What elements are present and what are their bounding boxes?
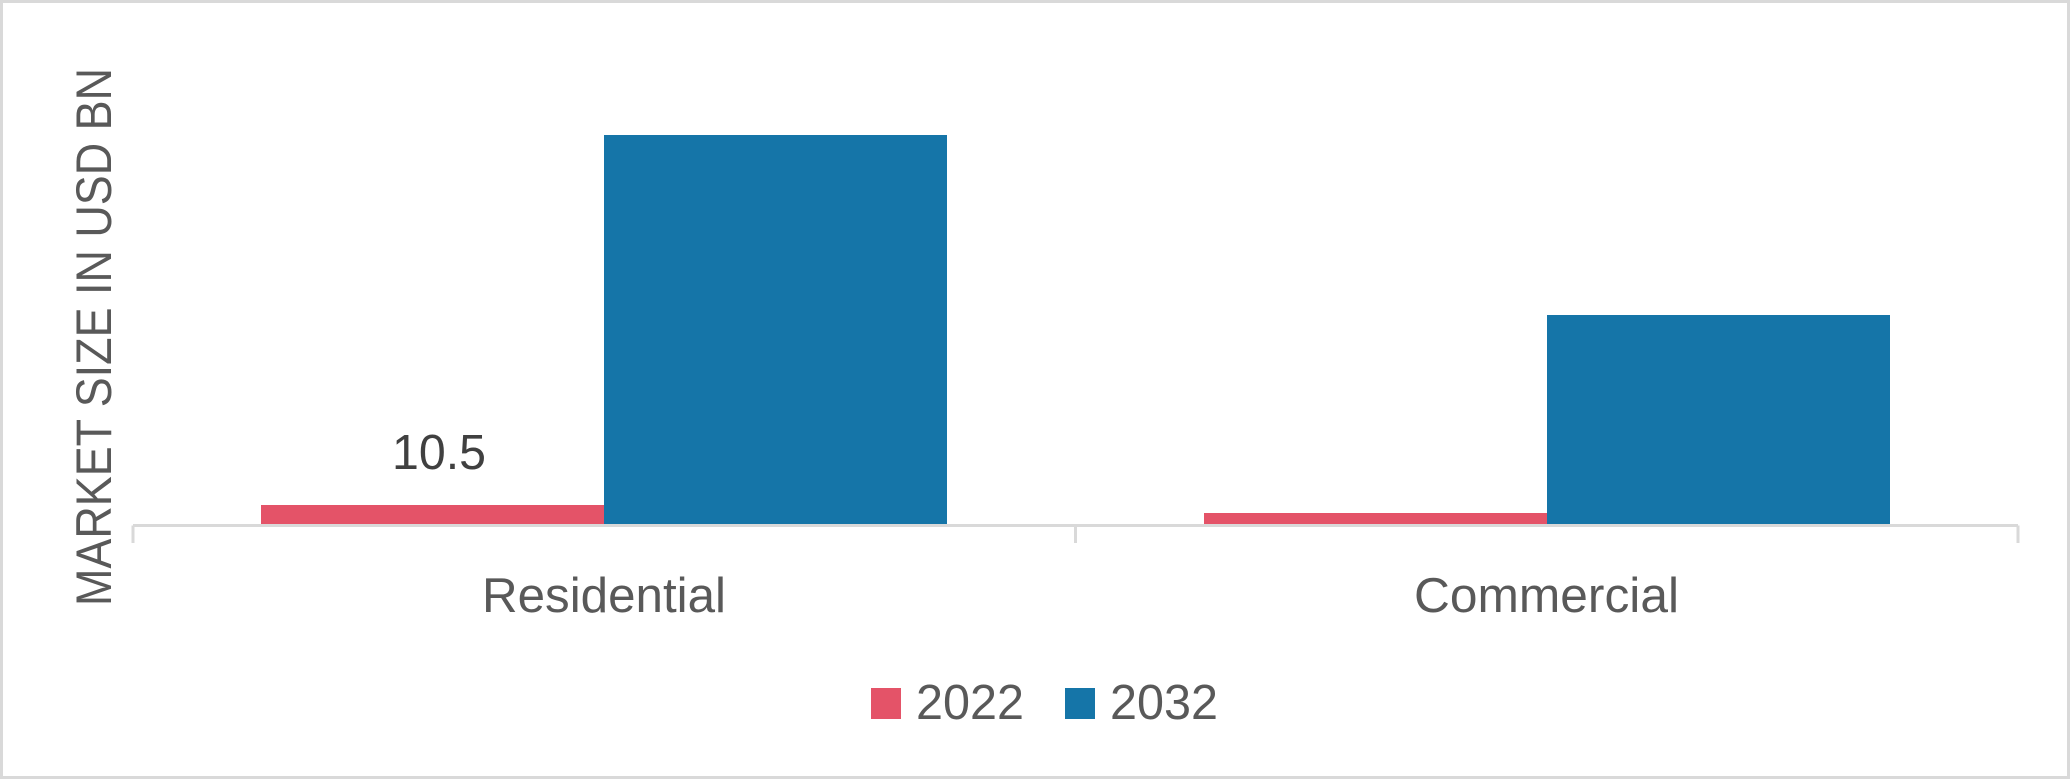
legend — [871, 676, 1218, 730]
legend label: 2032: 2032 — [1110, 676, 1218, 730]
bars: Residential — [261, 135, 947, 525]
bar: Commercial 2022 — [1204, 513, 1547, 525]
bars: Commercial — [1204, 315, 1890, 525]
category label: Residential: Residential — [482, 569, 726, 623]
bar: Residential 2032 — [604, 135, 947, 525]
legend swatch: 2022 — [871, 688, 901, 719]
bar: Commercial 2032 — [1547, 315, 1890, 525]
legend label: 2022: 2022 — [916, 676, 1024, 730]
y-axis title: MARKET SIZE IN USD BN — [66, 68, 122, 606]
data label: 10.5: 10.5 — [392, 426, 486, 480]
x axis — [133, 526, 2018, 543]
category label: Commercial: Commercial — [1414, 569, 1679, 623]
bar: Residential 2022 — [261, 505, 604, 525]
legend swatch: 2032 — [1065, 688, 1095, 719]
